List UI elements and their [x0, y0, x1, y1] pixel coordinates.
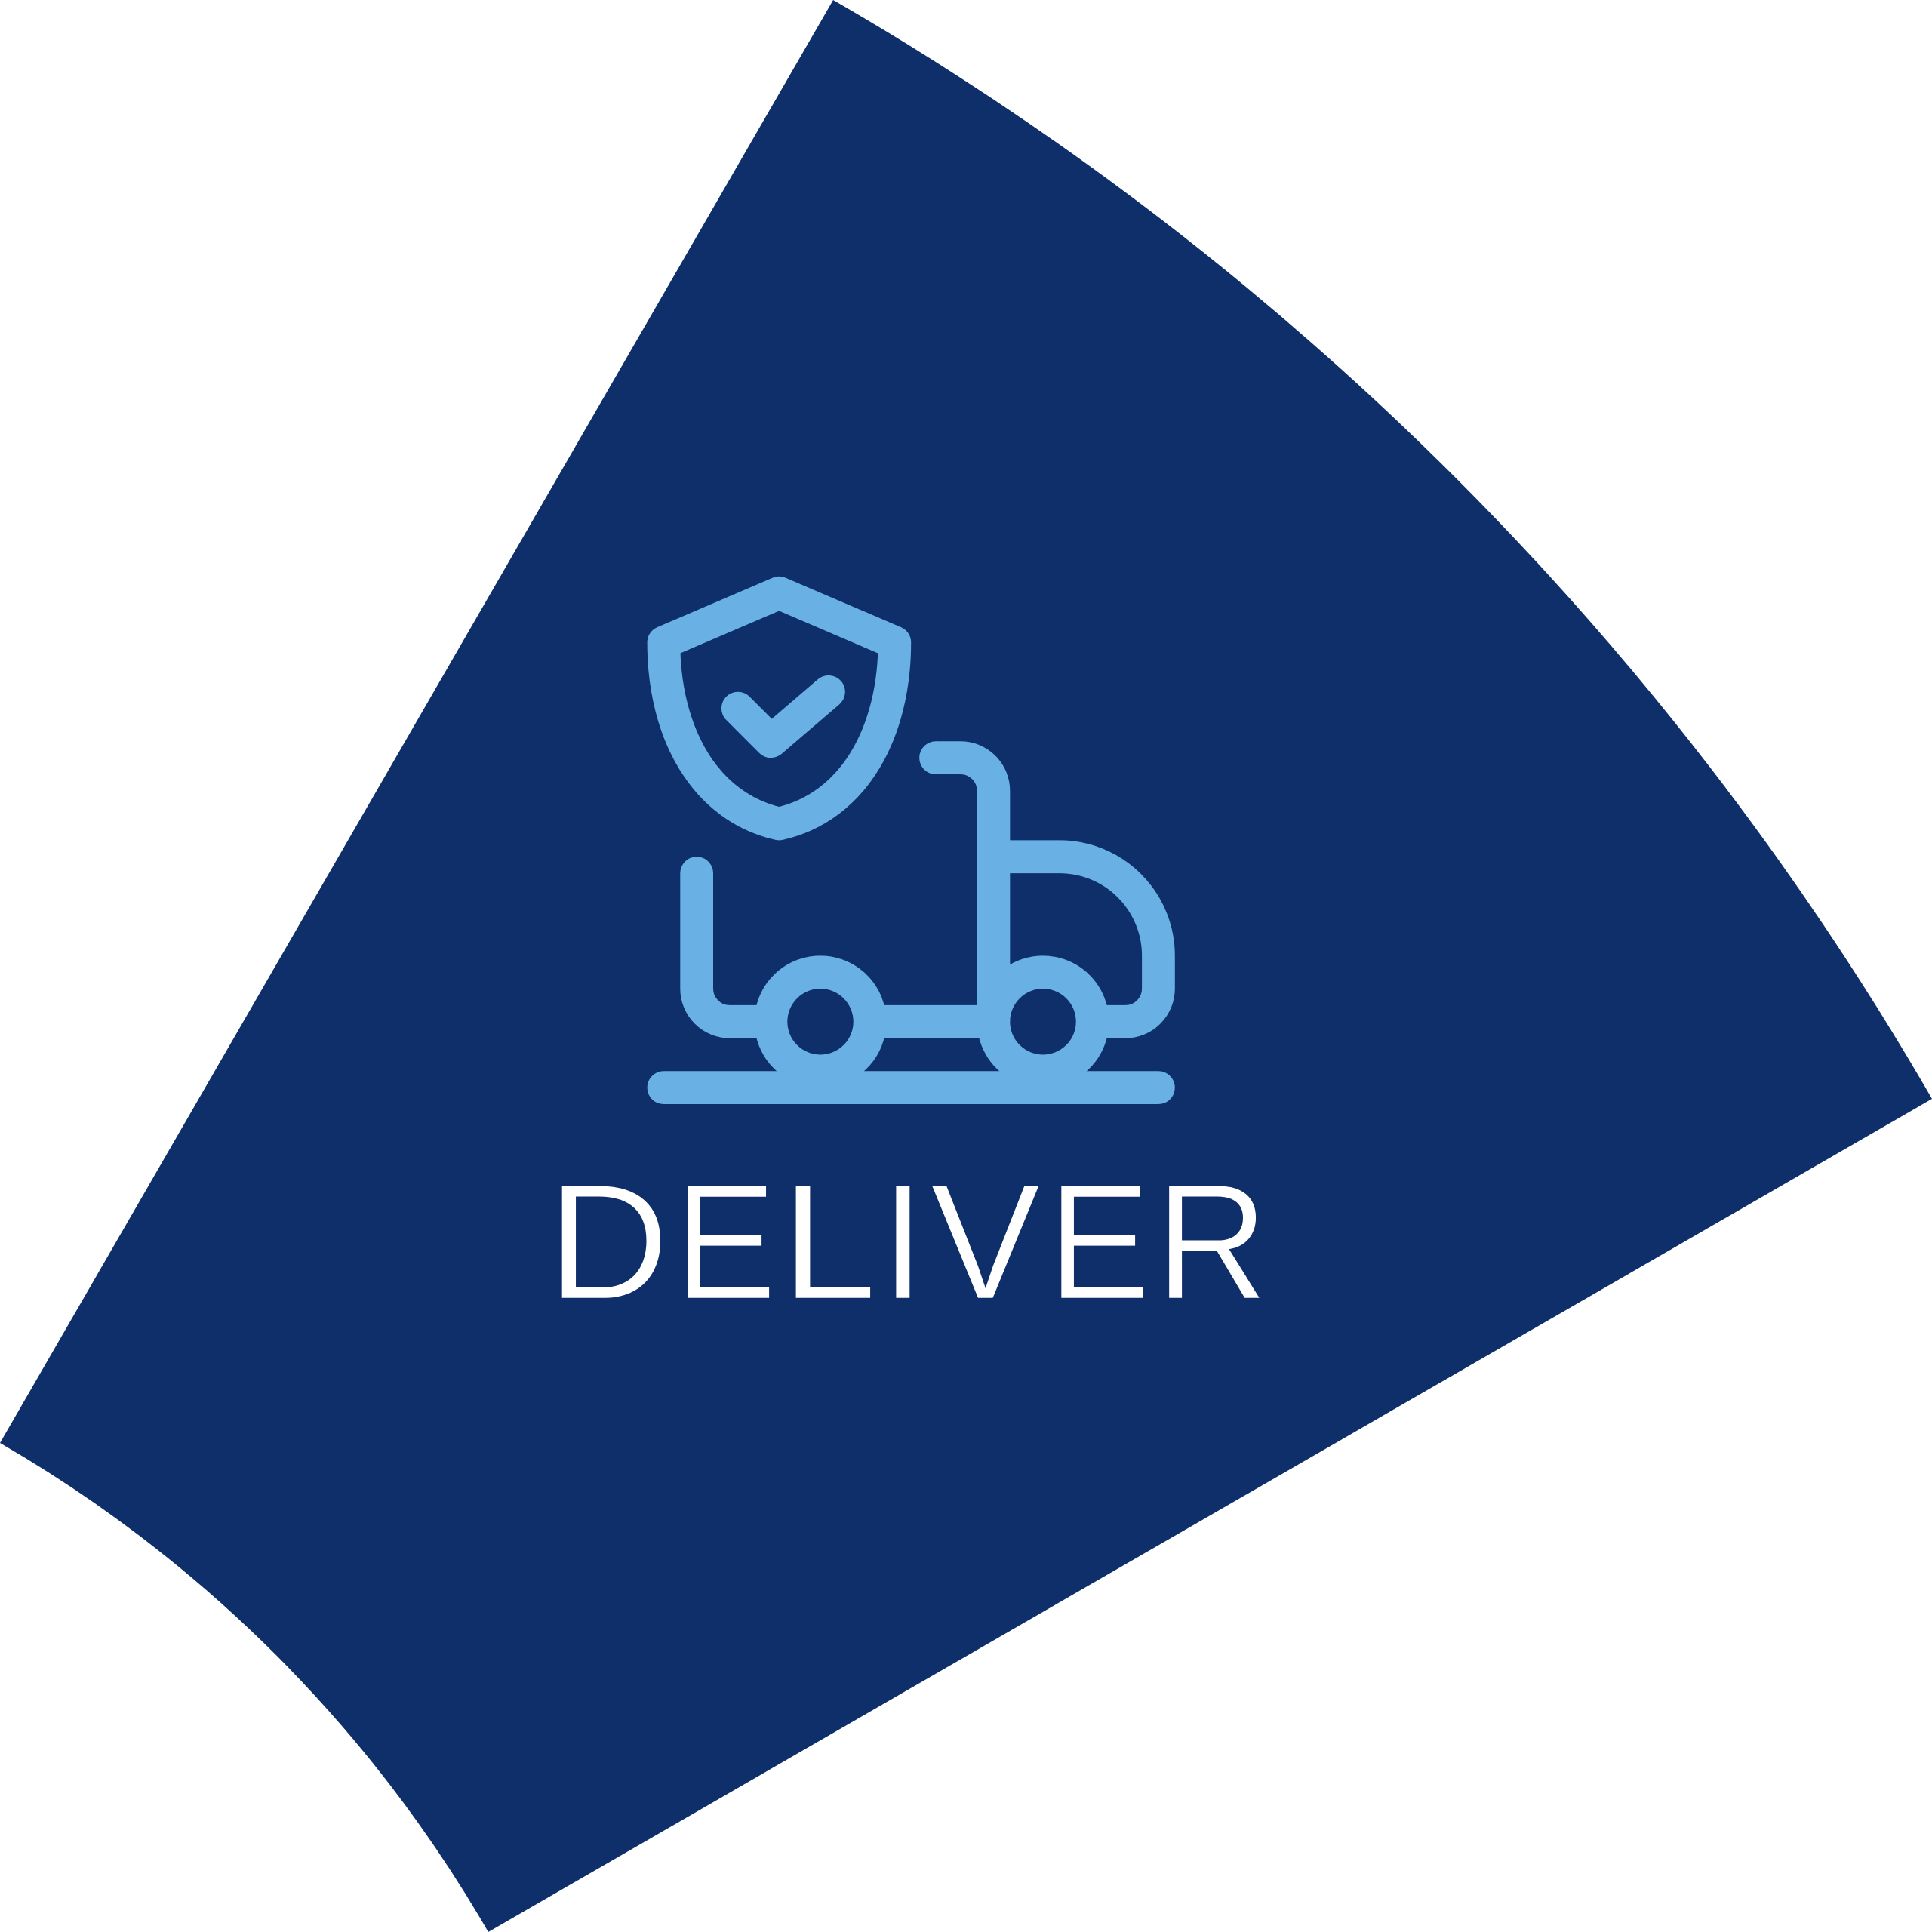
title: DELIVER: V: [930, 1150, 1041, 1334]
icon: front wheel: [771, 972, 870, 1071]
title: DELIVER: L: [780, 1150, 877, 1334]
icon: shield outline: [663, 593, 894, 824]
title: DELIVER: D: [547, 1150, 669, 1334]
icon: check mark: [738, 692, 829, 741]
icon: truck body end caps: [697, 758, 936, 873]
icon: ground line: [663, 1087, 1158, 1088]
title: DELIVER: E: [1048, 1150, 1150, 1334]
title: DELIVER: I: [880, 1150, 926, 1334]
title: DELIVER: R: [1155, 1150, 1268, 1334]
icon: delivery truck with shield: [663, 593, 1158, 1088]
icon: rear wheel: [993, 972, 1093, 1071]
title: DELIVER: E: [675, 1150, 777, 1334]
icon: truck body: [697, 758, 1158, 1022]
